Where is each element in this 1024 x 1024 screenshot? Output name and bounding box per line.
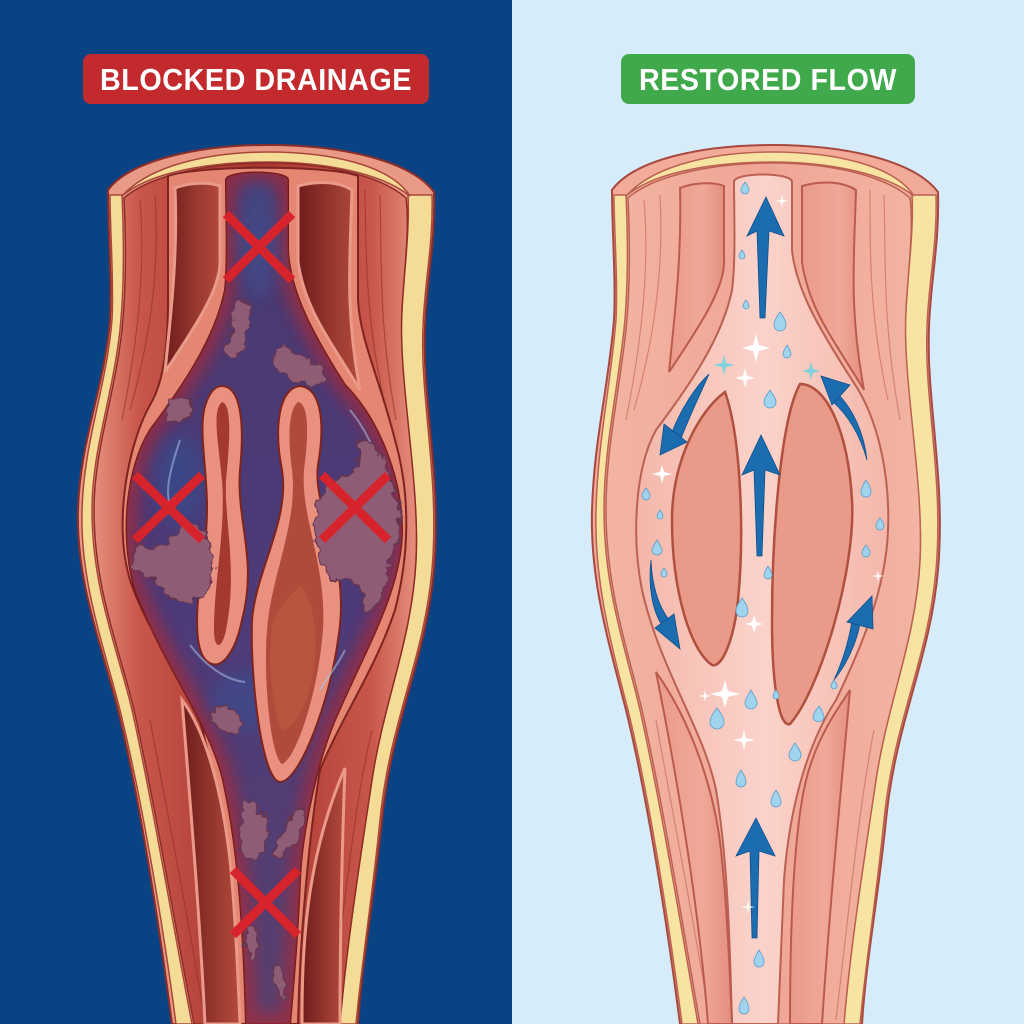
inner fold right [252,386,341,782]
sparkles [652,194,884,914]
panel: restored flow background [512,0,1024,1024]
panel: blocked drainage background [0,0,512,1024]
heading: restored flow [621,54,915,104]
fluid highlight streaks [168,410,374,690]
heading: blocked drainage [83,54,429,104]
muscle fibre lines [122,190,396,1020]
diagram: restored knee cross-section [592,145,940,1024]
yellow fat band top [122,152,410,196]
yellow fat band left [596,195,698,1024]
lower recess left [656,672,732,1024]
inner fold right [772,384,852,724]
upper recess left [165,183,220,372]
debris clumps [130,300,400,1000]
upper recess right [298,183,360,390]
muscle fibre lines [626,190,900,1020]
inner fold left [197,386,248,664]
yellow fat band left [82,195,192,1024]
red X markers [135,214,388,935]
lower recess right [302,768,345,1024]
heading: blocked drainage: BLOCKED DRAINAGE [100,62,412,97]
cavity outer pale rim [123,168,406,1024]
upper recess right [802,183,864,390]
synovial cavity [636,174,888,1024]
synovial fluid cavity [127,172,402,1024]
muscle layer [606,163,920,1024]
inner fold left [672,392,741,665]
fluid inner shading [127,172,402,1024]
blue flow arrows [650,197,873,938]
outer tissue wall [78,145,436,1024]
heading: restored flow: RESTORED FLOW [639,62,897,97]
water droplets [642,182,884,1014]
yellow fat band right [340,195,434,1024]
yellow fat band right [844,195,938,1024]
diagram: blocked knee cross-section [78,145,436,1024]
upper recess left [669,183,724,372]
lower recess right [790,690,850,1024]
yellow fat band top [626,152,914,196]
lower recess left [182,700,240,1024]
outer tissue wall [592,145,940,1024]
muscle layer [94,163,416,1024]
